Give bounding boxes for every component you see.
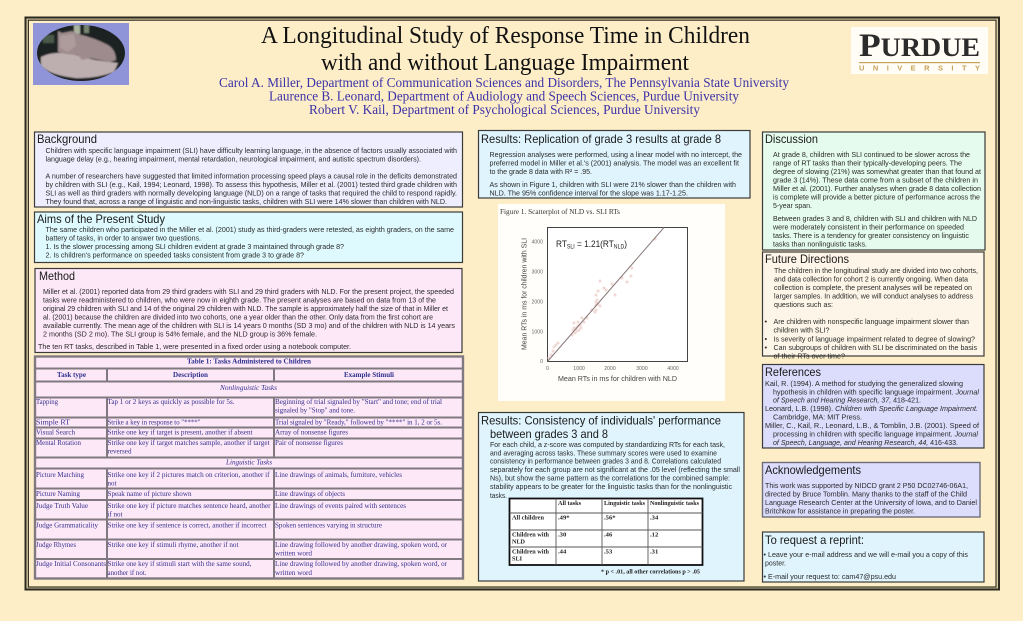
regression equation: ) xyxy=(624,239,627,250)
text: discussion body xyxy=(772,150,981,248)
text: results consistency body: tasks. xyxy=(490,491,507,500)
list: future questions: children with SLI? xyxy=(774,326,830,334)
heading: method: Method xyxy=(39,269,75,283)
authors and affiliations: Robert V. Kail, Department of Psychological Sciences, Purdue University xyxy=(309,103,700,118)
text: discussion body: range of RT tasks than their typically-developing peers. The xyxy=(773,158,962,168)
table section: linguistic tasks: Linguistic Tasks xyxy=(225,458,272,466)
list: future questions: Can subgroups of children with SLI be discriminated on the basis xyxy=(774,343,977,352)
text: results consistency body: and averaging across tasks. These summary scores were used to examine xyxy=(490,448,717,458)
panel: background xyxy=(34,132,462,207)
heading: future directions: Future Directions xyxy=(765,252,849,266)
table section: linguistic tasks: Strike one key if picture matches sentence heard, another xyxy=(108,501,271,510)
correlation table: NLD xyxy=(512,538,525,546)
correlation table: SLI xyxy=(512,556,522,562)
text: acknowledgements body: directed by Bruce Tomblin. Many thanks to the staff of the Child xyxy=(765,490,967,498)
heading: results replication: Results: Replication of grade 3 results at grade 8 xyxy=(481,132,721,146)
list: future questions: of their RTs over time? xyxy=(774,352,845,360)
table section: nonlinguistic tasks: Trial signaled by "Ready," followed by "****" in 1, 2 or 5s. xyxy=(275,418,442,426)
table section: linguistic tasks: Strike one key if sentence is correct, another if incorrect xyxy=(108,520,267,530)
text: reference list: Kail, R. (1994). A method for studying the generalized slowing xyxy=(765,379,963,388)
text: discussion body: degree of slowing (21%) was somewhat greater than that found at xyxy=(773,167,981,176)
table section: nonlinguistic tasks: Array of nonsense figures xyxy=(275,428,348,436)
table column headers: Example Stimuli xyxy=(344,370,394,379)
text: reprint instructions xyxy=(764,550,968,581)
table section: linguistic tasks: Line drawing followed by another drawing, spoken word, or xyxy=(275,559,448,568)
list: future questions xyxy=(764,317,977,360)
x axis ticks: 3000 xyxy=(636,366,648,372)
regression equation: RT xyxy=(556,239,568,250)
table section: linguistic tasks: Line drawings of animals, furniture, vehicles xyxy=(275,470,402,479)
y axis ticks: 4000 xyxy=(531,240,543,246)
y axis ticks: 2000 xyxy=(531,300,543,306)
text: results consistency body: consistency in performance between grades 3 and 8. Correlations calculated xyxy=(490,456,721,466)
table section: linguistic tasks: Line drawings of objects xyxy=(275,489,345,498)
list: future questions: • xyxy=(764,334,768,344)
text: discussion body: Miller et al. (2001). Further analyses when grade 8 data collection xyxy=(773,184,981,193)
table section: linguistic tasks: Strike one key if stimuli start with the same sound, xyxy=(108,559,252,568)
text: method body: original 29 children with SLI and 14 of the original 29 children with NLD. The sample is approximately half the size of that in Miller et xyxy=(43,304,448,313)
text: aims body: 1. Is the slower processing among SLI children evident at grade 3 maintained through grade 8? xyxy=(46,242,344,251)
correlation table: .31 xyxy=(650,548,658,556)
panel: future directions xyxy=(762,252,984,360)
table section: linguistic tasks: Judge Grammaticality xyxy=(36,520,98,530)
table section: linguistic tasks: Strike one key if 2 pictures match on criterion, another if xyxy=(108,470,270,479)
photo: lion statue xyxy=(33,22,129,85)
correlation table: Children with xyxy=(512,548,549,556)
table section: nonlinguistic tasks: Tapping xyxy=(36,397,58,406)
table section: linguistic tasks: Line drawing followed by another drawing, spoken word, or xyxy=(275,540,448,549)
list: future questions: Is severity of language impairment related to degree of slowing? xyxy=(774,334,975,344)
text: discussion body: grade 3 (14%). These data come from a subset of the children in xyxy=(773,176,978,184)
table section: nonlinguistic tasks: Mental Rotation xyxy=(36,438,81,447)
text: results replication body xyxy=(490,150,742,198)
text: method body: al. (2001) because the children are divided into two cohorts, one a year older than the other. Only data from the first cohort are xyxy=(43,312,433,322)
text: results replication body: Regression analyses were performed, using a linear model with no intercept, the xyxy=(490,150,742,159)
logo: Purdue University xyxy=(851,27,988,74)
text: method body: Miller et al. (2001) reported data from 29 third graders with SLI and 29 third graders with NLD. For the present project, the speeded xyxy=(43,287,454,296)
text: method body xyxy=(38,287,455,351)
table section: nonlinguistic tasks: Pair of nonsense figures xyxy=(275,438,343,447)
heading: background: Background xyxy=(37,132,97,146)
table section: linguistic tasks: Spoken sentences varying in structure xyxy=(275,520,383,530)
panel: results consistency xyxy=(478,412,744,581)
heading: references: References xyxy=(765,365,821,379)
table section: linguistic tasks: Strike one key if stimuli rhyme, another if not xyxy=(108,540,239,549)
text: method body: available currently. The mean age of the children with SLI is 14 years 0 months (SD 3 mo) and of the children with NLD is 14 years xyxy=(43,321,455,330)
text: reference list: Miller, C., Kail, R., Leonard, L.B., & Tomblin, J.B. (2001). Speed of xyxy=(765,421,980,430)
table section: nonlinguistic tasks: Simple RT xyxy=(36,418,71,426)
text: background body: Children with specific language impairment (SLI) have difficulty learning language, in the absence of factors usually associated with xyxy=(46,146,457,155)
panel: acknowledgements xyxy=(762,462,980,517)
correlation table: All tasks xyxy=(558,500,581,507)
x axis ticks: 0 xyxy=(546,366,549,372)
correlation table: .49* xyxy=(558,514,570,522)
text: reprint instructions: poster. xyxy=(765,558,786,568)
y axis ticks: 0 xyxy=(540,359,543,365)
table column headers xyxy=(57,370,394,379)
panel: aims xyxy=(34,212,462,262)
text: results replication body: As shown in Figure 1, children with SLI were 21% slower than the children with xyxy=(490,180,736,189)
heading: results consistency: Results: Consistency of individuals' performance xyxy=(481,414,721,428)
text: aims body: The same children who participated in the Miller et al. (2001) study as third-graders were retested, as eighth graders, on the same xyxy=(46,225,454,234)
text: reference list: Leonard, L.B. (1998). Children with Specific Language Impairment. xyxy=(765,404,978,413)
scatter points xyxy=(548,238,656,360)
text: reference list: hypothesis in children with specific language impairment. Journal xyxy=(773,388,979,396)
table section: nonlinguistic tasks: Visual Search xyxy=(36,428,75,436)
table section: linguistic tasks: Judge Initial Consonants xyxy=(36,559,106,568)
heading: acknowledgements: Acknowledgements xyxy=(765,463,861,477)
table section: linguistic tasks: if not xyxy=(108,510,123,518)
table section: nonlinguistic tasks: Tap 1 or 2 keys as quickly as possible for 5s. xyxy=(108,397,235,406)
correlation table xyxy=(510,498,702,565)
y axis ticks: 3000 xyxy=(531,270,543,276)
table section: linguistic tasks: Line drawings of events paired with sentences xyxy=(275,501,406,510)
table section: linguistic tasks: another if not. xyxy=(108,568,147,577)
text: acknowledgements body: Language Research Center at the University of Iowa, and to Daniel xyxy=(765,498,977,507)
heading: results consistency xyxy=(481,414,721,441)
table section: linguistic tasks: not xyxy=(108,478,117,488)
figure 1: scatterplot xyxy=(498,204,725,401)
text: future directions body: collection is complete, the present analyses will be repeated on xyxy=(774,283,972,292)
panel: references xyxy=(762,364,984,448)
text: future directions body xyxy=(774,266,978,309)
logo: Purdue University: UNIVERSITY xyxy=(859,64,980,72)
heading: aims: Aims of the Present Study xyxy=(37,212,165,226)
correlation table: Children with xyxy=(512,532,549,538)
text: aims body: battery of tasks, in order to answer two questions. xyxy=(46,234,201,242)
table section: linguistic tasks: Judge Rhymes xyxy=(36,540,76,549)
panel: discussion xyxy=(762,132,985,250)
text: future directions body: larger samples. In addition, we will conduct analyses to address xyxy=(774,292,973,300)
correlation table: Nonlinguistic tasks xyxy=(650,500,699,507)
text: reference list: of Speech and Hearing Research, 37, 418-421. xyxy=(773,396,921,404)
text: background body: They found that, across a range of linguistic and non-linguistic tasks, children with SLI were 14% slower than children with NLD. xyxy=(46,197,447,206)
correlation table: .44 xyxy=(558,548,567,556)
text: reference list: processing in children with specific language impairment. Journal xyxy=(773,430,978,438)
text: future directions body: questions such as: xyxy=(774,300,833,309)
table section: linguistic tasks: written word xyxy=(275,568,312,577)
text: discussion body: tasks than nonlinguistic tasks. xyxy=(773,240,867,248)
panel: results replication xyxy=(478,130,750,198)
x axis ticks: 2000 xyxy=(604,366,616,372)
text: background body: by children with SLI (e.g., Kail, 1994; Leonard, 1998). To assess this hypothesis, Miller et al. (2001) tested third grade children with xyxy=(46,180,457,189)
text: discussion body: 5-year span. xyxy=(773,201,812,210)
text: reprint instructions: • E-mail your request to: cam47@psu.edu xyxy=(764,572,896,581)
text: aims body: 2. Is children's performance on speeded tasks consistent from grade 3 to grade 8? xyxy=(46,250,304,260)
table title: Table 1: Tasks Administered to Children xyxy=(187,356,311,366)
text: results consistency body: For each child, a z-score was computed by standardizing RTs for each task, xyxy=(490,440,725,449)
regression line xyxy=(548,228,664,362)
x axis label: Mean RTs in ms for children with NLD xyxy=(558,376,677,383)
text: background body: A number of researchers have suggested that limited information processing speed plays a causal role in the deficits demonstrated xyxy=(46,172,457,180)
correlation table: .46 xyxy=(604,532,613,538)
list: future questions: Are children with nonspecific language impairment slower than xyxy=(774,317,969,326)
text: reference list: of Speech, Language, and Hearing Research, 44, 416-433. xyxy=(773,438,958,447)
text: results replication body: preferred model in Miller et al.'s (2001) analysis. The model was an excellent fit xyxy=(490,158,739,168)
table section: nonlinguistic tasks: Strike one key if target matches sample, another if target xyxy=(108,438,270,447)
correlation table: .34 xyxy=(650,514,659,522)
text: background body xyxy=(46,146,457,206)
table section: linguistic tasks: Picture Naming xyxy=(36,489,80,498)
list: future questions: • xyxy=(764,343,768,352)
x axis ticks: 1000 xyxy=(573,366,585,372)
text: method body: The ten RT tasks, described in Table 1, were presented in a fixed order using a notebook computer. xyxy=(38,342,351,351)
authors and affiliations: Laurence B. Leonard, Department of Audiology and Speech Sciences, Purdue University xyxy=(269,90,739,104)
text: results consistency body: stability appears to be greater for the linguistic tasks than for the nonlinguistic xyxy=(490,482,732,491)
text: discussion body: tasks. There is a tendency for greater consistency on linguistic xyxy=(773,231,969,240)
heading: discussion: Discussion xyxy=(765,132,818,146)
authors and affiliations: Carol A. Miller, Department of Communication Sciences and Disorders, The Pennsylvania State University xyxy=(219,76,789,91)
title: with and without Language Impairment xyxy=(321,49,689,76)
title: A Longitudinal Study of Response Time in Children xyxy=(261,22,750,49)
table section: linguistic tasks: Speak name of picture shown xyxy=(108,489,192,498)
text: method body: 2 months (SD 2 mo). The SLI group is 54% female, and the NLD group is 36% female. xyxy=(43,330,317,338)
figure caption: Figure 1. Scatterplot of NLD vs. SLI RTs xyxy=(500,207,620,216)
text: discussion body: is complete will provide a better picture of performance across the xyxy=(773,192,980,202)
text: reference list xyxy=(765,379,980,447)
table column headers: Description xyxy=(173,370,208,379)
logo: Purdue University: PURDUE xyxy=(859,28,980,64)
authors and affiliations xyxy=(219,76,789,118)
table section: nonlinguistic tasks: reversed xyxy=(108,446,132,456)
table section: linguistic tasks: Judge Truth Value xyxy=(36,501,89,510)
table section: linguistic tasks: written word xyxy=(275,548,312,558)
table section: linguistic tasks: Picture Matching xyxy=(36,470,84,479)
table section: nonlinguistic tasks xyxy=(36,383,442,456)
table section: linguistic tasks xyxy=(36,458,448,577)
x axis ticks xyxy=(546,366,679,372)
text: aims body xyxy=(46,225,454,260)
text: discussion body: Between grades 3 and 8, children with SLI and children with NLD xyxy=(773,214,977,223)
regression equation: SLI xyxy=(567,244,575,250)
heading: request a reprint: To request a reprint: xyxy=(765,533,864,547)
text: future directions body: and data collection for cohort 2 is currently ongoing. When data xyxy=(774,274,969,284)
heading: results consistency: between grades 3 and 8 xyxy=(490,427,608,441)
text: background body: language delay (e.g., hearing impairment, mental retardation, neurological impairment, and autistic spectrum disorders). xyxy=(46,154,421,164)
table column headers: Task type xyxy=(57,370,87,379)
table footnote: * p < .01, all other correlations p > .05 xyxy=(601,568,701,576)
correlation table: All children xyxy=(512,514,544,522)
x axis ticks: 4000 xyxy=(667,366,679,372)
panel: method xyxy=(35,268,462,352)
regression equation: NLD xyxy=(614,244,625,250)
correlation table: .53 xyxy=(604,548,613,556)
text: method body: tasks were readministered to children, who were now in eighth grade. The present analyses are based on data from 13 of the xyxy=(43,296,436,304)
y axis ticks xyxy=(531,240,543,365)
table section: nonlinguistic tasks: Nonlinguistic Tasks xyxy=(219,383,277,392)
correlation table: .12 xyxy=(650,532,659,538)
list: future questions: • xyxy=(764,317,768,326)
correlation table: .56* xyxy=(604,514,616,522)
title xyxy=(261,22,750,76)
table section: nonlinguistic tasks: Strike a key in response to "****" xyxy=(108,418,200,426)
text: discussion body: were moderately consistent in their performance on speeded xyxy=(772,222,964,232)
y axis ticks: 1000 xyxy=(531,330,543,336)
panel: request a reprint xyxy=(762,532,984,582)
text: discussion body: At grade 8, children with SLI continued to be slower across the xyxy=(773,150,970,159)
text: acknowledgements body xyxy=(765,481,977,516)
table section: nonlinguistic tasks: signaled by "Stop" and tone. xyxy=(275,406,355,414)
text: reference list: Cambridge, MA: MIT Press. xyxy=(773,412,862,422)
text: acknowledgements body: This work was supported by NIDCD grant 2 P50 DC02746-06A1, xyxy=(765,481,968,490)
text: future directions body: The children in the longitudinal study are divided into two cohorts, xyxy=(774,266,978,275)
table 1: tasks administered to children xyxy=(35,356,463,578)
text: reprint instructions: • Leave your e-mail address and we will e-mail you a copy of this xyxy=(764,550,968,559)
y axis label: Mean RTs in ms for children with SLI xyxy=(522,238,528,350)
correlation table: Linguistic tasks xyxy=(604,500,645,507)
text: results consistency body: Ns), but show the same pattern as the correlations for the combined sample: xyxy=(490,474,730,482)
table section: nonlinguistic tasks: Beginning of trial signaled by "Start" and tone; end of trial xyxy=(275,397,442,406)
correlation table: .30 xyxy=(558,532,567,538)
text: results replication body: to the grade 8 data with R² = .95. xyxy=(490,167,592,176)
text: results consistency body: separately for each group are not significant at the .05 level (reflecting the small xyxy=(490,465,740,474)
text: background body: SLI as well as third graders with normally developing language (NLD) on a range of tasks that required the child to respond rapidly. xyxy=(46,188,457,198)
table section: nonlinguistic tasks: Strike one key if target is present, another if absent xyxy=(108,428,253,436)
text: results replication body: NLD. The 95% confidence interval for the slope was 1.17-1.25. xyxy=(490,188,688,198)
text: acknowledgements body: Britchkow for assistance in preparing the poster. xyxy=(765,506,915,516)
text: results consistency body xyxy=(490,440,740,500)
regression equation: = 1.21(RT xyxy=(575,239,614,250)
